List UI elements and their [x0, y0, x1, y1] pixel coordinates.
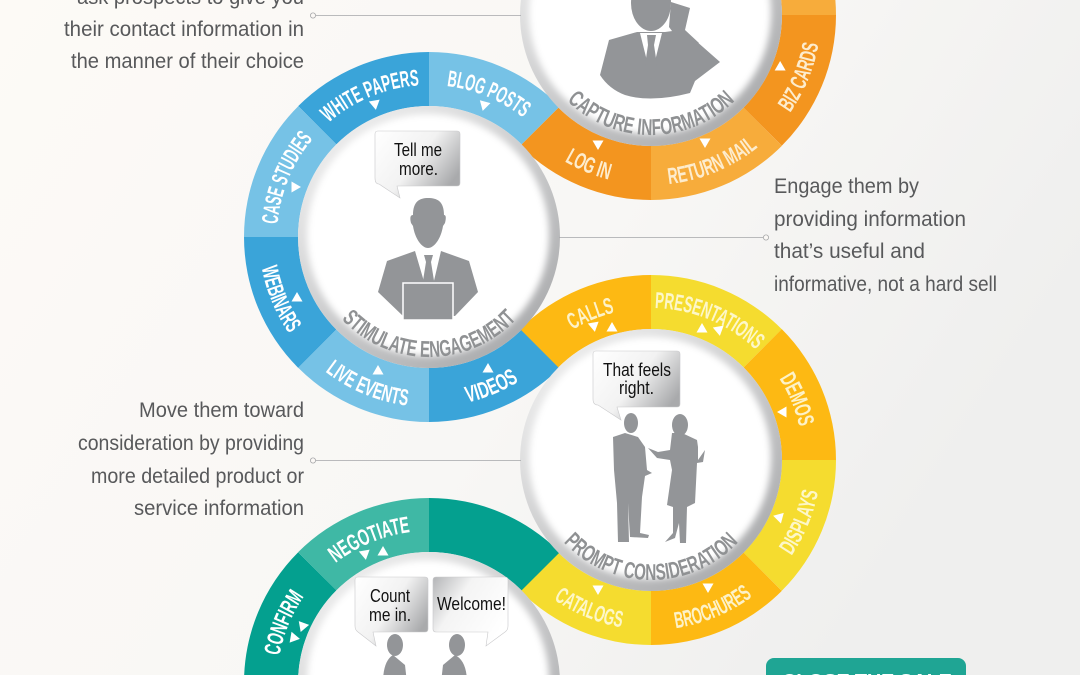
ring: stimulate engagement (blue): BLOG POSTS — [448, 70, 531, 116]
disc: prompt consideration — [520, 329, 782, 591]
disc: capture information — [520, 0, 782, 146]
ring: capture information (orange): BIZ CARDS — [778, 42, 818, 112]
ring: stimulate engagement (blue): VIDEOS — [464, 369, 517, 402]
ring: stimulate engagement (blue): WEBINARS — [262, 264, 301, 332]
ring: capture information (orange): RETURN MAIL — [668, 138, 758, 184]
text block: consideration — [78, 398, 304, 520]
ring: prompt consideration (yellow): CALLS — [567, 298, 614, 328]
speech bubble: that feels right: That feels — [603, 359, 671, 380]
speech bubble: tell me more — [375, 131, 460, 198]
ring: stimulate engagement (blue) — [244, 52, 559, 422]
speech bubble: welcome: Welcome! — [437, 593, 506, 614]
speech bubble: tell me more: Tell me — [394, 139, 442, 160]
text block: engage: informative, not a hard sell — [774, 272, 997, 296]
text block: consideration: service information — [134, 496, 304, 520]
ring: close the sale (teal): CONFIRM — [264, 588, 304, 654]
leader line: consideration — [310, 458, 521, 463]
leader line: engage — [559, 235, 769, 240]
speech bubble: count me in — [355, 577, 428, 646]
text block: capture: their contact information in — [64, 17, 304, 41]
text block: engage: Engage them by — [774, 174, 919, 198]
ring: stimulate engagement (blue): LIVE EVENTS — [326, 359, 408, 406]
ring: close the sale (teal) — [244, 498, 559, 675]
ring: prompt consideration (yellow): DEMOS — [780, 371, 814, 426]
speech bubble: welcome — [433, 577, 508, 646]
button: close the sale — [766, 658, 966, 675]
text block: engage: providing information — [774, 207, 966, 231]
leader line: capture — [310, 13, 521, 18]
ring: prompt consideration (yellow): CATALOGS — [556, 588, 623, 627]
disc label: CAPTURE INFORMATION — [570, 90, 734, 136]
disc: close the sale — [298, 552, 560, 675]
icon: man and woman talking — [613, 413, 705, 543]
disc label: PROMPT CONSIDERATION — [564, 532, 738, 580]
speech bubble: count me in: me in. — [369, 604, 411, 625]
ring: stimulate engagement (blue): CASE STUDIES — [262, 130, 312, 224]
ring: prompt consideration (yellow): PRESENTATIONS — [656, 292, 765, 348]
ring: stimulate engagement (blue): WHITE PAPERS — [318, 70, 418, 122]
icon: businessman on phone — [600, 0, 720, 99]
disc: stimulate engagement — [298, 106, 560, 368]
ring: prompt consideration (yellow): DISPLAYS — [778, 490, 818, 556]
ring: capture information (orange): LOG IN — [565, 148, 612, 180]
ring: prompt consideration (yellow) — [521, 275, 836, 645]
ring: close the sale (teal): NEGOTIATE — [327, 516, 410, 562]
text block: engage: that’s useful and — [774, 239, 925, 263]
text block: capture: the manner of their choice — [71, 49, 304, 73]
text block: engage — [774, 174, 997, 296]
icon: two people shaking hands — [383, 634, 467, 675]
disc label: STIMULATE ENGAGEMENT — [344, 308, 514, 358]
text block: consideration: more detailed product or — [91, 464, 304, 488]
ring: capture information (orange) — [522, 0, 836, 200]
speech bubble: that feels right — [593, 351, 680, 420]
speech bubble: tell me more: more. — [399, 158, 438, 179]
ring arrows — [290, 61, 786, 644]
text block: consideration: Move them toward — [139, 398, 304, 422]
text block: capture — [64, 0, 304, 73]
speech bubble: count me in: Count — [370, 585, 410, 606]
text block: consideration: consideration by providing — [78, 431, 304, 455]
speech bubble: that feels right: right. — [619, 377, 654, 398]
icon: businessman with laptop — [378, 198, 478, 320]
ring: prompt consideration (yellow): BROCHURES — [674, 585, 751, 628]
